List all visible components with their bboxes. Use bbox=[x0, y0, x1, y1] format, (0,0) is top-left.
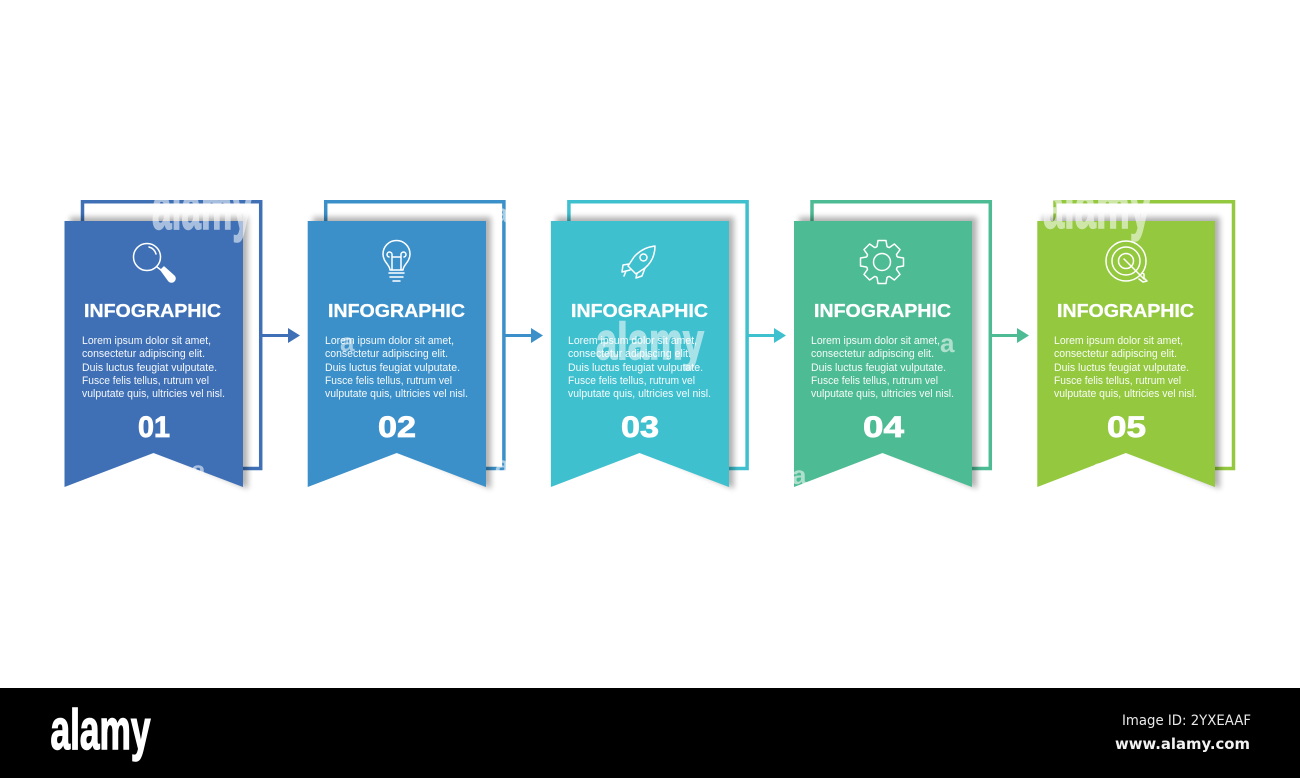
body text 01: vulputate quis, ultricies vel nisl. bbox=[82, 388, 225, 400]
panel: step 01 bbox=[64, 202, 300, 489]
body text 01: Fusce felis tellus, rutrum vel bbox=[82, 375, 209, 387]
footer logo: alamy bbox=[50, 698, 151, 762]
watermarks: a bbox=[340, 327, 355, 357]
arrow 04 bbox=[991, 328, 1029, 343]
body text 04: Lorem ipsum dolor sit amet, bbox=[811, 335, 940, 347]
body text 04 bbox=[811, 335, 954, 400]
image id: Image ID: 2YXEAAF bbox=[1122, 713, 1251, 729]
watermarks: a bbox=[1092, 453, 1107, 483]
body text 02: consectetur adipiscing elit. bbox=[325, 348, 448, 360]
body text 03: Lorem ipsum dolor sit amet, bbox=[568, 335, 697, 347]
body text 04: Duis luctus feugiat vulputate. bbox=[811, 362, 946, 374]
body text 01: Lorem ipsum dolor sit amet, bbox=[82, 335, 211, 347]
panel: step 04 bbox=[794, 202, 1029, 489]
body text 03: consectetur adipiscing elit. bbox=[568, 348, 691, 360]
connector frame 04 bbox=[812, 202, 990, 469]
watermarks: alamy bbox=[152, 174, 252, 243]
body text 04: consectetur adipiscing elit. bbox=[811, 348, 934, 360]
watermarks: a bbox=[494, 198, 509, 228]
body text 05: vulputate quis, ultricies vel nisl. bbox=[1054, 388, 1197, 400]
number 03: 03 bbox=[621, 411, 659, 444]
body text 02: Duis luctus feugiat vulputate. bbox=[325, 362, 460, 374]
body text 05: Fusce felis tellus, rutrum vel bbox=[1054, 375, 1181, 387]
number 02: 02 bbox=[378, 411, 416, 444]
body text 01: consectetur adipiscing elit. bbox=[82, 348, 205, 360]
heading 04: INFOGRAPHIC bbox=[814, 300, 951, 321]
connector frame 01 bbox=[82, 202, 261, 469]
body text 02: Lorem ipsum dolor sit amet, bbox=[325, 335, 454, 347]
body text 03: vulputate quis, ultricies vel nisl. bbox=[568, 388, 711, 400]
icon: rocket bbox=[622, 246, 655, 278]
number 05: 05 bbox=[1107, 411, 1146, 444]
watermarks bbox=[152, 173, 1151, 490]
body text 05 bbox=[1054, 335, 1197, 400]
watermarks: a bbox=[191, 455, 206, 485]
watermarks: alamy bbox=[596, 313, 704, 371]
panel: step 03 bbox=[551, 202, 786, 489]
ribbon card 04 bbox=[794, 221, 972, 487]
number 01: 01 bbox=[138, 411, 170, 444]
card shadow 01 bbox=[70, 217, 248, 489]
card shadow 03 bbox=[556, 217, 734, 489]
panel: step 02 bbox=[308, 202, 543, 489]
arrow 01 bbox=[262, 328, 300, 343]
watermarks: alamy bbox=[1043, 173, 1151, 242]
body text 05: Duis luctus feugiat vulputate. bbox=[1054, 362, 1189, 374]
body text 05: consectetur adipiscing elit. bbox=[1054, 348, 1177, 360]
icon: target bbox=[1106, 241, 1147, 282]
body text 01 bbox=[82, 335, 225, 400]
icon: gear bbox=[860, 240, 904, 284]
icon: light bulb bbox=[383, 241, 410, 281]
ribbon card 01 bbox=[64, 221, 243, 487]
connector frame 03 bbox=[569, 202, 747, 469]
connector frame 02 bbox=[326, 202, 504, 469]
body text 02: Fusce felis tellus, rutrum vel bbox=[325, 375, 452, 387]
body text 04: vulputate quis, ultricies vel nisl. bbox=[811, 388, 954, 400]
heading 03: INFOGRAPHIC bbox=[571, 300, 708, 321]
arrow 02 bbox=[505, 328, 543, 343]
body text 05: Lorem ipsum dolor sit amet, bbox=[1054, 335, 1183, 347]
icon: magnifying glass bbox=[134, 244, 175, 282]
body text 01: Duis luctus feugiat vulputate. bbox=[82, 362, 217, 374]
website: www.alamy.com bbox=[1115, 735, 1250, 753]
ribbon card 03 bbox=[551, 221, 729, 487]
body text 02 bbox=[325, 335, 468, 400]
card shadow 02 bbox=[313, 217, 491, 489]
body text 03: Fusce felis tellus, rutrum vel bbox=[568, 375, 695, 387]
ribbon card 02 bbox=[308, 221, 486, 487]
ribbon card 05 bbox=[1037, 221, 1215, 487]
heading 02: INFOGRAPHIC bbox=[328, 300, 465, 321]
body text 03: Duis luctus feugiat vulputate. bbox=[568, 362, 703, 374]
number 04: 04 bbox=[863, 411, 904, 444]
body text 04: Fusce felis tellus, rutrum vel bbox=[811, 375, 938, 387]
watermarks: a bbox=[495, 450, 510, 480]
panel: step 05 bbox=[1037, 202, 1234, 489]
watermarks: a bbox=[940, 328, 955, 358]
arrow 03 bbox=[748, 328, 786, 343]
heading 01: INFOGRAPHIC bbox=[84, 300, 221, 321]
body text 02: vulputate quis, ultricies vel nisl. bbox=[325, 388, 468, 400]
heading 05: INFOGRAPHIC bbox=[1057, 300, 1194, 321]
body text 03 bbox=[568, 335, 711, 400]
connector frame 05 bbox=[1055, 202, 1234, 469]
card shadow 05 bbox=[1042, 217, 1220, 489]
card shadow 04 bbox=[799, 217, 977, 489]
watermarks: a bbox=[792, 460, 807, 490]
footer bar bbox=[0, 688, 1300, 778]
